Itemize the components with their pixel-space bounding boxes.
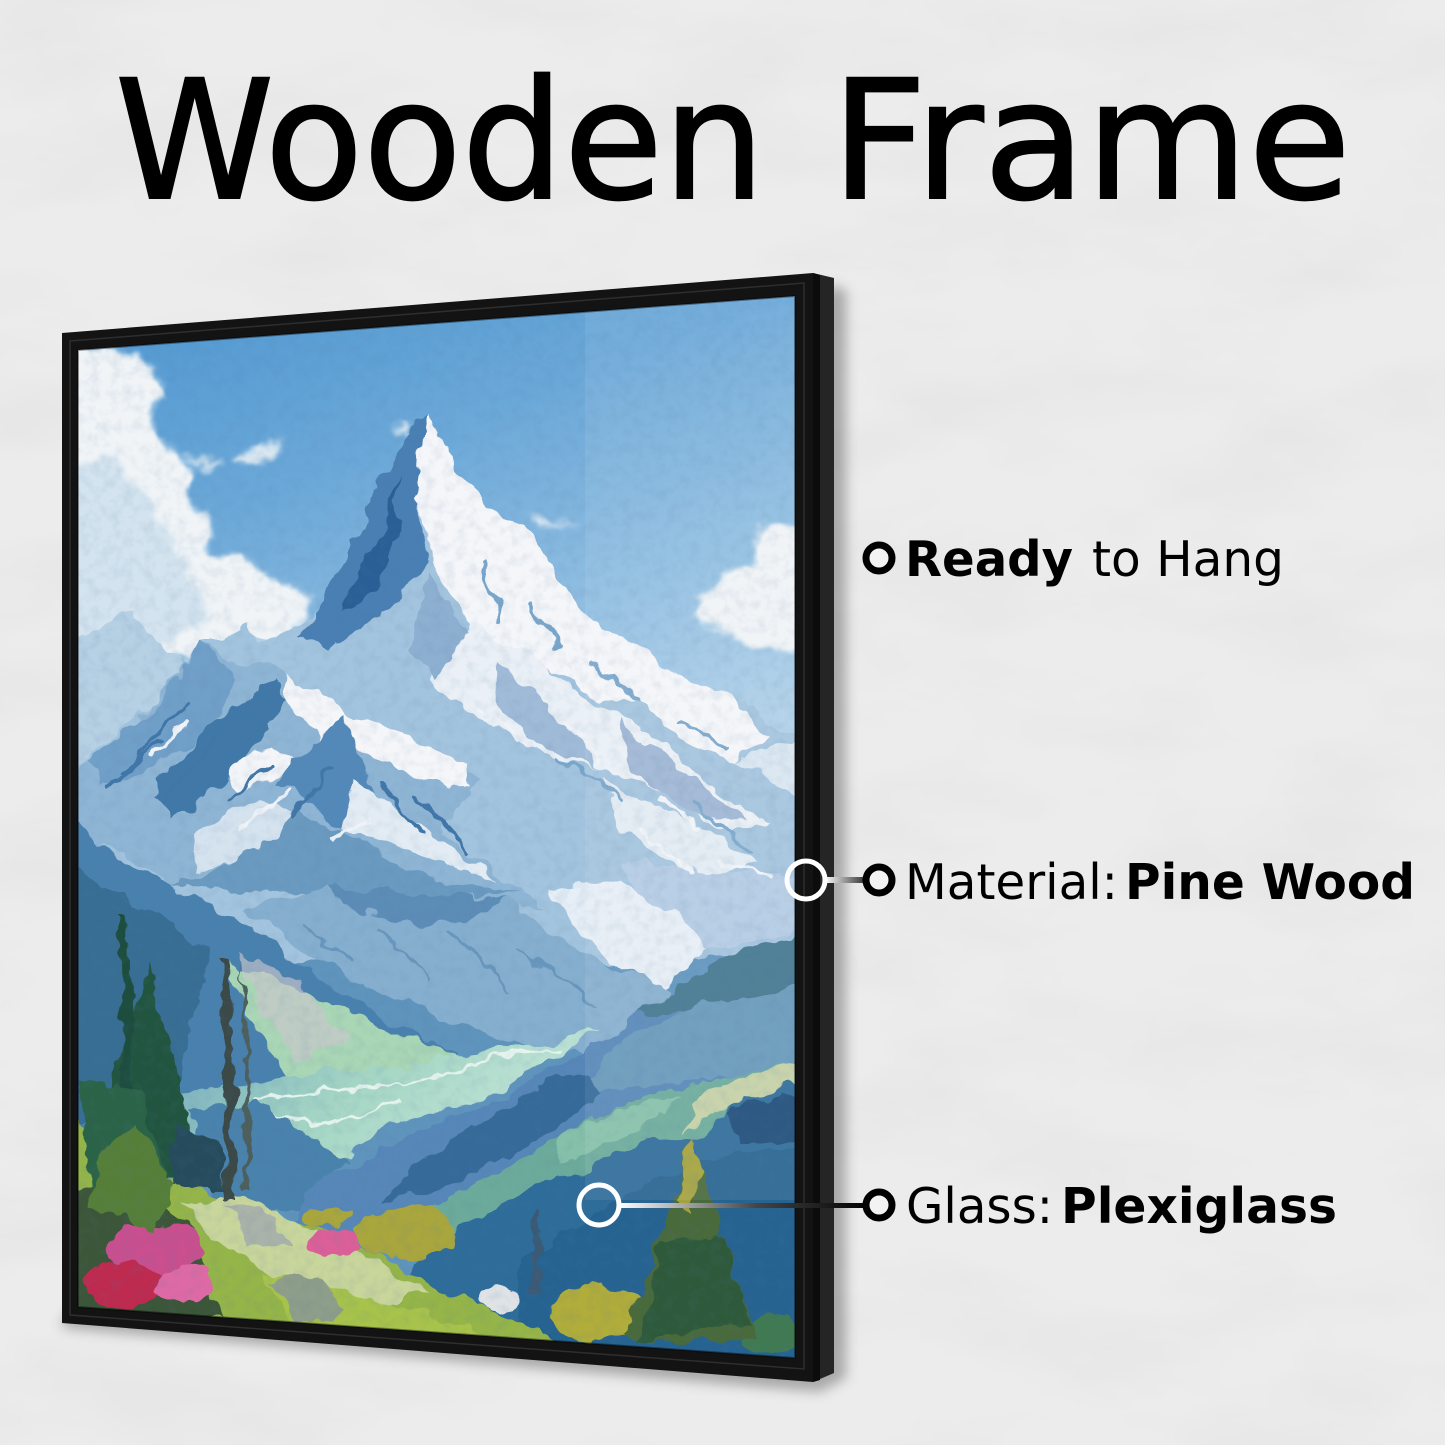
marker (866, 545, 892, 571)
front left massif (70, 640, 545, 910)
title (115, 45, 1351, 237)
callout: material (787, 854, 1415, 911)
foreground slope (78, 1120, 554, 1341)
rock shadows on peak (295, 416, 430, 650)
glass reflection band (585, 280, 795, 1200)
valley floor with river (181, 1027, 600, 1160)
label: to Hang (1092, 531, 1284, 588)
label: Pine Wood (1125, 854, 1415, 911)
connector line (824, 877, 869, 883)
left blue slope (78, 822, 458, 1128)
snow on main peak (415, 416, 770, 760)
callout: ready to hang (866, 531, 1284, 588)
title: Frame (831, 45, 1351, 237)
painting: alpine landscape (78, 296, 795, 1358)
end marker (866, 1192, 892, 1218)
label: Glass: (906, 1178, 1053, 1235)
frame ring marker (787, 861, 825, 899)
rocks (225, 1205, 290, 1245)
paint grain (70, 290, 800, 1365)
label: Ready (905, 531, 1073, 588)
base fill (166, 954, 727, 1276)
green hill (432, 1062, 795, 1234)
dark forest slope (409, 1080, 795, 1322)
callout: glass (579, 1178, 1337, 1235)
glacier (545, 880, 710, 990)
sky (114, 296, 795, 734)
wooden frame (62, 273, 834, 1382)
right blue hill (296, 936, 795, 1246)
label: Plexiglass (1061, 1178, 1337, 1235)
end marker (866, 867, 892, 893)
snow streaks (110, 560, 770, 880)
title: Wooden (115, 45, 765, 237)
glass ring marker (579, 1185, 619, 1225)
pink flowers (85, 1224, 361, 1307)
far mountains left (78, 610, 268, 768)
mid ridge (240, 885, 670, 1060)
thin dead tree (534, 1210, 541, 1290)
framed painting (40, 273, 846, 1392)
dark grass left bottom (70, 1180, 220, 1320)
main mountain body (70, 416, 805, 960)
connector line (618, 1203, 870, 1208)
right pine tree (620, 1135, 760, 1345)
label: Material: (905, 854, 1118, 911)
pale green slope (225, 960, 460, 1082)
frame inner shadow line (78, 296, 795, 1358)
left conifer trees (80, 915, 250, 1230)
wall shadow (62, 285, 846, 1392)
yellow shrubs (301, 1206, 800, 1357)
clouds (70, 345, 805, 660)
